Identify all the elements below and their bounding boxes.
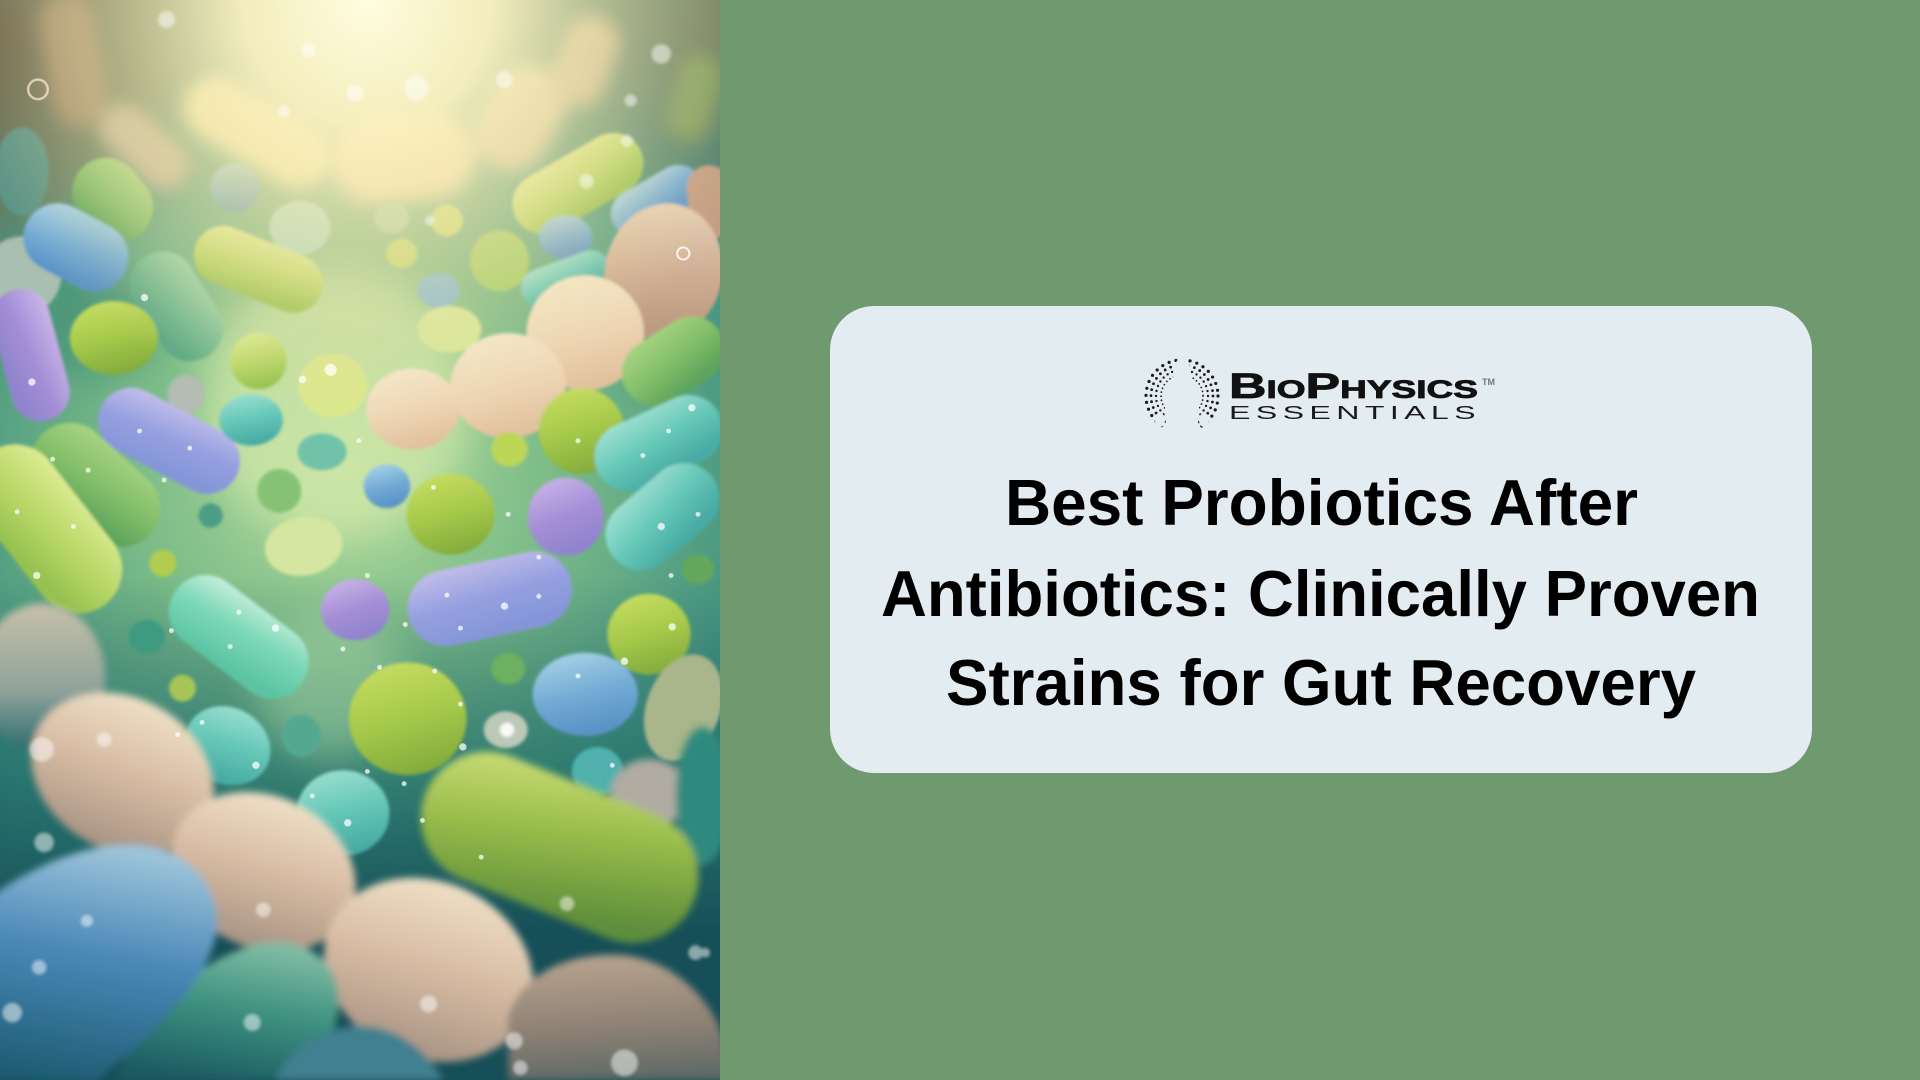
panel: probiotic bacteria illustration — [0, 0, 720, 1080]
title heading — [881, 476, 1760, 719]
foreground blurred bacteria — [0, 604, 735, 1080]
logo: BioPhysics Essentials — [1144, 358, 1495, 428]
title heading: Antibiotics: Clinically Proven — [881, 557, 1760, 630]
mid-ground bacteria — [0, 122, 738, 856]
logo icon: dotted circle with human figure — [1146, 356, 1218, 434]
logo wordmark: ESSENTIALS — [1229, 403, 1481, 423]
illustration background — [0, 0, 720, 1080]
logo wordmark — [1229, 367, 1495, 423]
sunlight glow — [0, 0, 720, 416]
background blurred bacteria — [35, 0, 728, 206]
sparkles — [2, 11, 710, 1076]
panel: title card — [830, 306, 1812, 773]
logo wordmark: BioPhysics — [1229, 367, 1478, 406]
logo wordmark: TM — [1482, 377, 1495, 387]
title heading: Strains for Gut Recovery — [946, 646, 1696, 719]
